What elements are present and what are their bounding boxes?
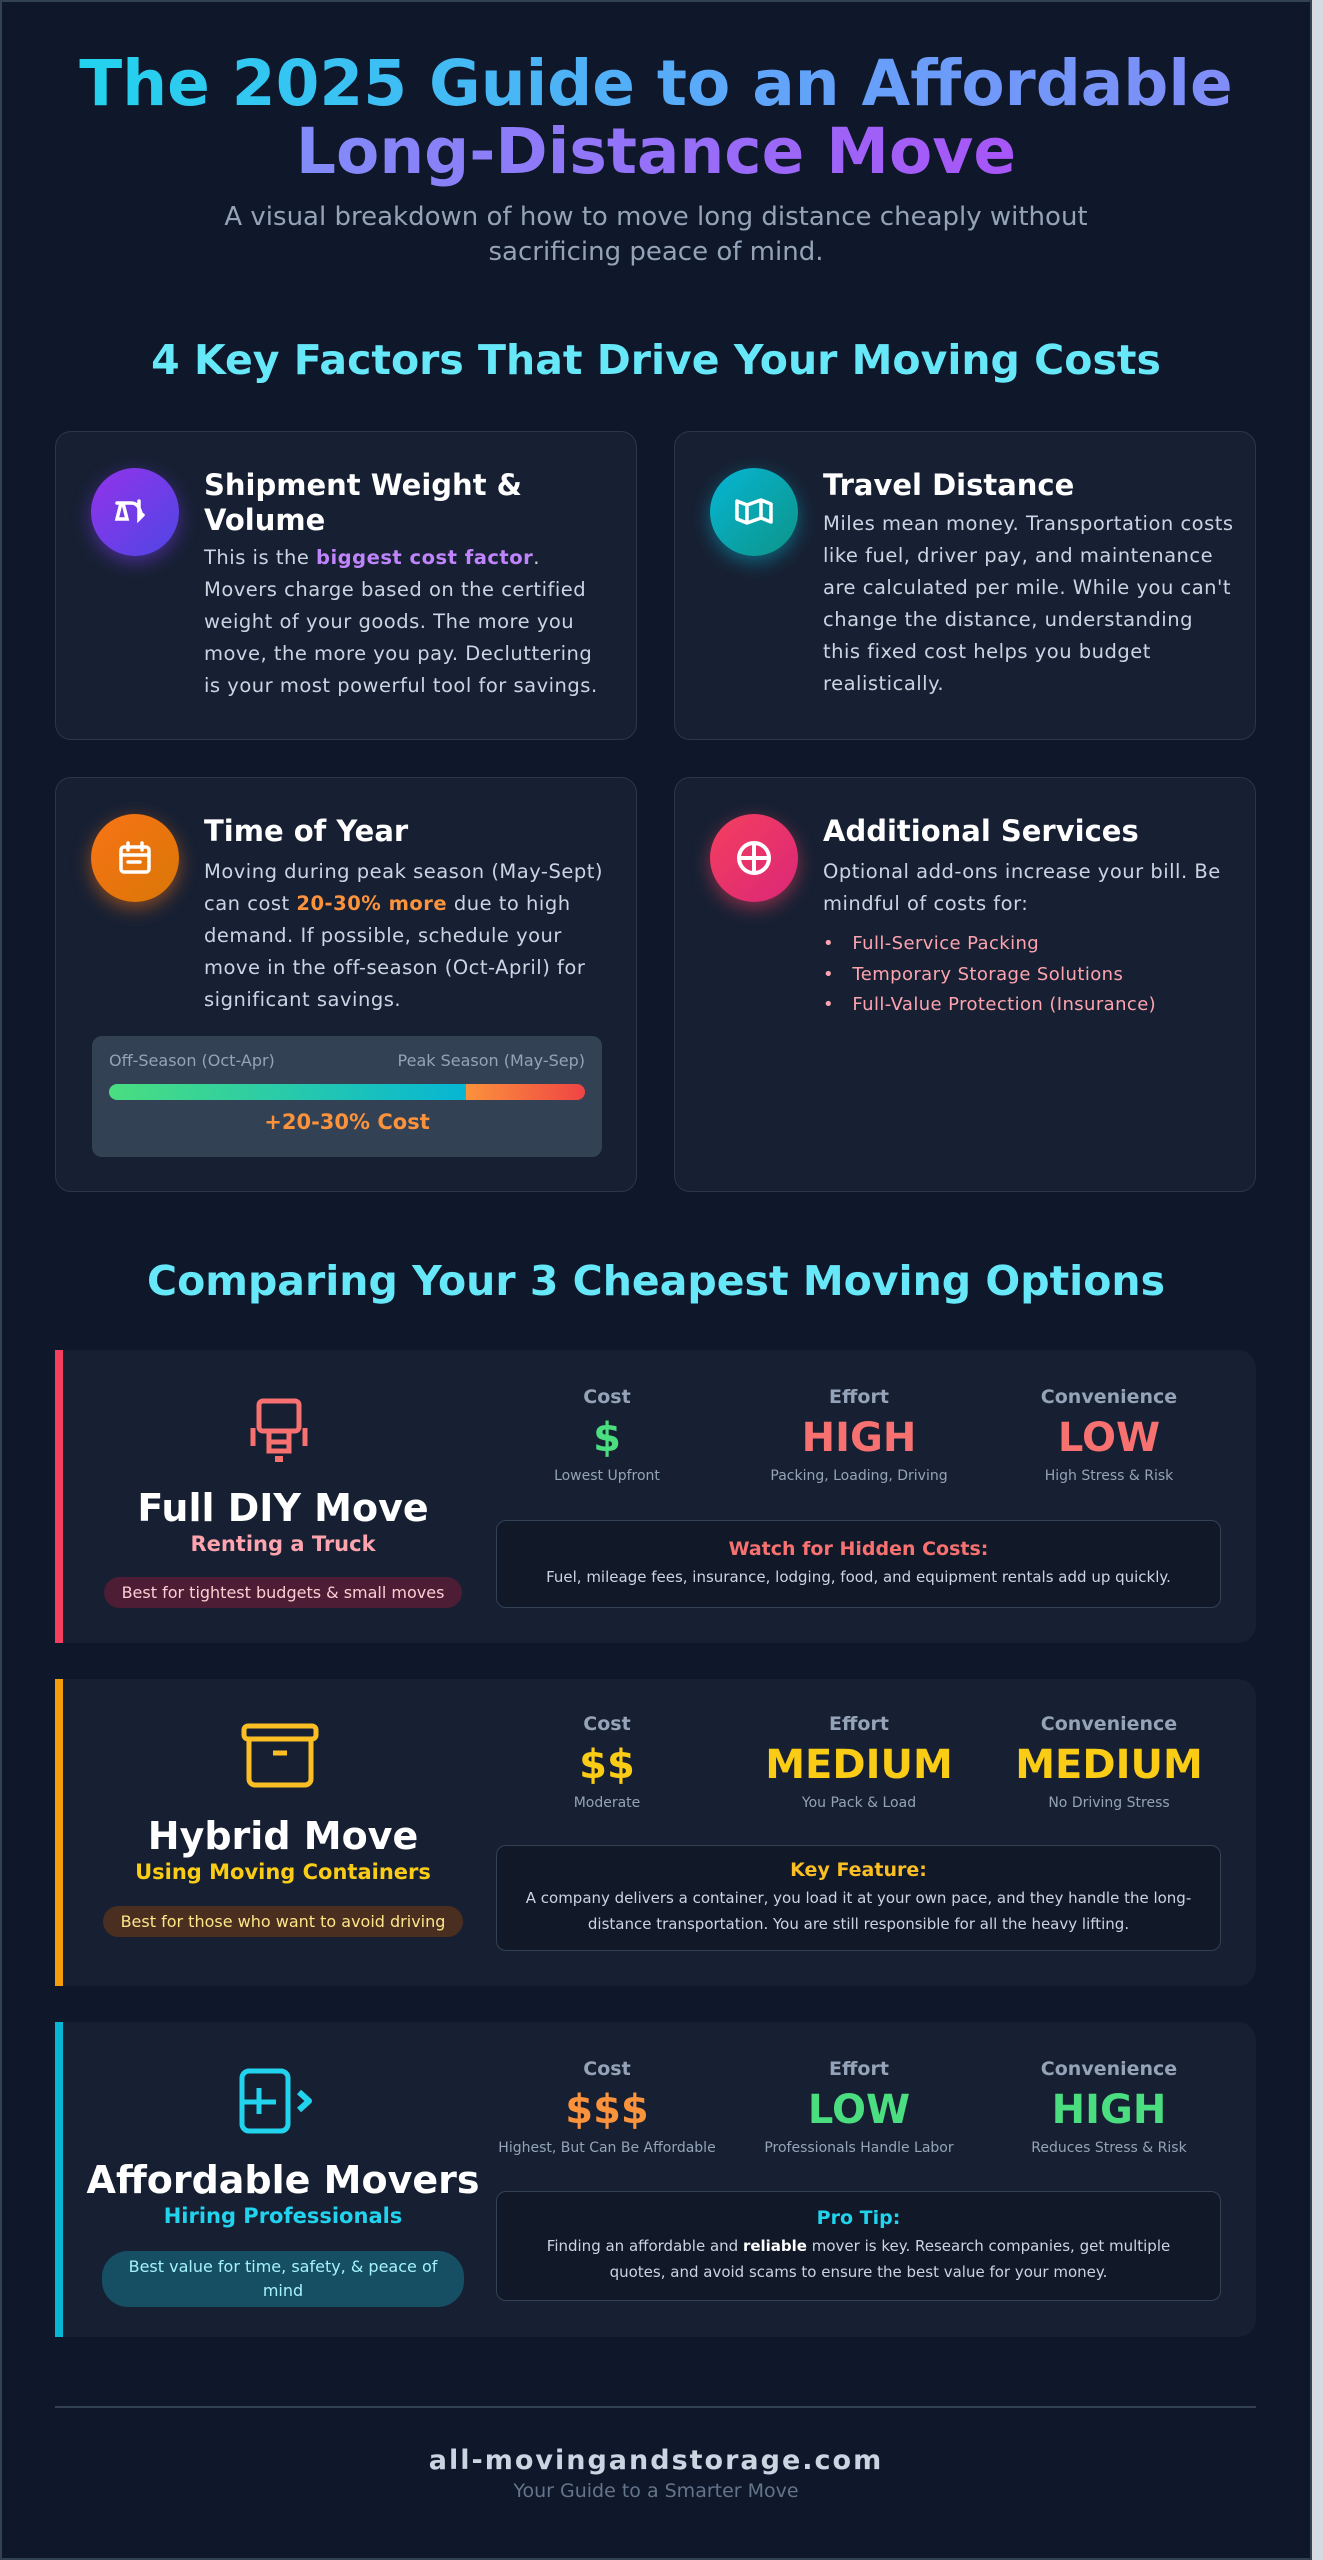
panel: travel distance	[674, 431, 1256, 740]
title: The 2025 Guide to an Affordable	[79, 47, 1233, 120]
heading: Shipment Weight & Volume	[204, 468, 522, 537]
panel: shipment weight	[55, 431, 637, 740]
metric: convenience: No Driving Stress	[1048, 1795, 1170, 1811]
metric: effort: MEDIUM	[765, 1742, 953, 1788]
callout: hidden costs	[496, 1520, 1221, 1608]
pill: Best value for time, safety, & peace of mind	[129, 2257, 437, 2300]
bullet list: • Full-Service Packing	[823, 933, 1039, 954]
metric: cost	[554, 1386, 660, 1484]
metric: cost	[498, 2058, 716, 2156]
icon: truck	[250, 1398, 308, 1462]
metric: effort: You Pack & Load	[802, 1795, 916, 1811]
option title: Renting a Truck	[190, 1532, 376, 1556]
callout: pro tip: Finding an affordable and reliable mover is key. Research companies, get multiple quotes, and avoid scams to ensure the best value for your money.	[547, 2237, 1170, 2281]
metric: convenience: LOW	[1058, 1415, 1160, 1461]
metric: cost: $	[593, 1415, 621, 1461]
metric: convenience	[1015, 1713, 1203, 1811]
metric: effort: Effort	[829, 1386, 889, 1408]
pill: Best for tightest budgets & small moves	[122, 1583, 444, 1602]
metric: cost	[574, 1713, 640, 1811]
metric: effort	[764, 2058, 954, 2156]
heading: Time of Year	[204, 814, 408, 848]
metric: cost: $$	[579, 1742, 635, 1788]
chart: season bar: Peak Season (May-Sep)	[398, 1051, 585, 1070]
option title: Full DIY Move	[137, 1486, 429, 1530]
option title	[137, 1486, 429, 1556]
callout: hidden costs: Fuel, mileage fees, insurance, lodging, food, and equipment rentals add up quickly.	[546, 1568, 1171, 1586]
title	[79, 47, 1233, 188]
section heading: key factors: 4 Key Factors That Drive Your Moving Costs	[151, 336, 1161, 384]
metric: effort	[770, 1386, 948, 1484]
heading: Additional Services	[823, 814, 1139, 848]
heading: Travel Distance	[823, 468, 1074, 502]
option title	[86, 2158, 479, 2228]
chart: season bar	[92, 1036, 602, 1157]
metric: cost: Moderate	[574, 1795, 640, 1811]
metric: convenience	[1031, 2058, 1187, 2156]
bullet list	[823, 933, 1156, 1015]
footer: Your Guide to a Smarter Move	[513, 2480, 799, 2502]
subtitle: A visual breakdown of how to move long distance cheaply without	[224, 202, 1088, 232]
icon: scale	[91, 468, 179, 556]
title: Long-Distance Move	[296, 115, 1016, 188]
option title: Hybrid Move	[148, 1814, 418, 1858]
option title: Hiring Professionals	[164, 2204, 402, 2228]
body text: Moving during peak season (May-Sept) can cost 20-30% more due to high demand. If possible, schedule your move in the off-season (Oct-April) for significant savings.	[204, 860, 603, 1011]
metric: effort: Professionals Handle Labor	[764, 2140, 954, 2156]
icon: lifebuoy	[710, 814, 798, 902]
metric: convenience: Convenience	[1041, 2058, 1177, 2080]
metric: convenience: Reduces Stress & Risk	[1031, 2140, 1187, 2156]
metric: convenience: MEDIUM	[1015, 1742, 1203, 1788]
callout: key feature	[496, 1845, 1221, 1951]
metric: cost: Highest, But Can Be Affordable	[498, 2140, 716, 2156]
panel: hybrid move	[55, 1679, 1256, 1986]
metric: convenience: Convenience	[1041, 1386, 1177, 1408]
callout: hidden costs: Watch for Hidden Costs:	[729, 1538, 988, 1560]
body text: This is the biggest cost factor. Movers charge based on the certified weight of your goods. The more you move, the more you pay. Decluttering is your most powerful tool for savings.	[204, 546, 598, 697]
icon: calendar	[91, 814, 179, 902]
subtitle: sacrificing peace of mind.	[489, 237, 823, 267]
subtitle	[224, 202, 1088, 267]
chart: season bar: Off-Season (Oct-Apr)	[109, 1051, 275, 1070]
metric: cost: Lowest Upfront	[554, 1468, 660, 1484]
metric: convenience: High Stress & Risk	[1045, 1468, 1173, 1484]
panel: affordable movers	[55, 2022, 1256, 2337]
panel: full DIY move	[55, 1350, 1256, 1643]
panel: additional services	[674, 777, 1256, 1192]
metric: cost: Cost	[583, 1713, 631, 1735]
option title: Affordable Movers	[87, 2158, 479, 2202]
footer: all-movingandstorage.com	[429, 2445, 883, 2476]
icon: container box	[242, 1724, 318, 1788]
metric: convenience	[1041, 1386, 1177, 1484]
option title	[135, 1814, 431, 1884]
option title: Using Moving Containers	[135, 1860, 431, 1884]
metric: cost: Cost	[583, 2058, 631, 2080]
body text: Miles mean money. Transportation costs like fuel, driver pay, and maintenance are calculated per mile. While you can't change the distance, understanding this fixed cost helps you budget realistically.	[823, 512, 1234, 695]
metric: effort	[765, 1713, 953, 1811]
metric: effort: Packing, Loading, Driving	[770, 1468, 948, 1484]
section heading: options: Comparing Your 3 Cheapest Moving Options	[147, 1257, 1165, 1305]
metric: effort: HIGH	[802, 1415, 916, 1461]
icon: dolly	[240, 2068, 312, 2134]
panel: time of year	[55, 777, 637, 1192]
icon: map	[710, 468, 798, 556]
bullet list: • Temporary Storage Solutions	[823, 964, 1123, 984]
body text: Optional add-ons increase your bill. Be mindful of costs for:	[823, 860, 1221, 915]
metric: effort: LOW	[808, 2087, 910, 2133]
pill: Best for those who want to avoid driving	[121, 1912, 445, 1931]
metric: convenience: Convenience	[1041, 1713, 1177, 1735]
metric: effort: Effort	[829, 1713, 889, 1735]
metric: effort: Effort	[829, 2058, 889, 2080]
bullet list: • Full-Value Protection (Insurance)	[823, 994, 1156, 1015]
callout: key feature: A company delivers a container, you load it at your own pace, and they handle the long-distance transportation. You are still responsible for all the heavy lifting.	[526, 1889, 1191, 1933]
footer	[429, 2445, 883, 2502]
chart: season bar: +20-30% Cost	[264, 1110, 430, 1134]
callout: pro tip: Pro Tip:	[817, 2207, 900, 2229]
metric: cost: Cost	[583, 1386, 631, 1408]
callout: key feature: Key Feature:	[790, 1859, 927, 1881]
callout: pro tip	[496, 2191, 1221, 2301]
metric: convenience: HIGH	[1052, 2087, 1166, 2133]
metric: cost: $$$	[565, 2087, 649, 2133]
